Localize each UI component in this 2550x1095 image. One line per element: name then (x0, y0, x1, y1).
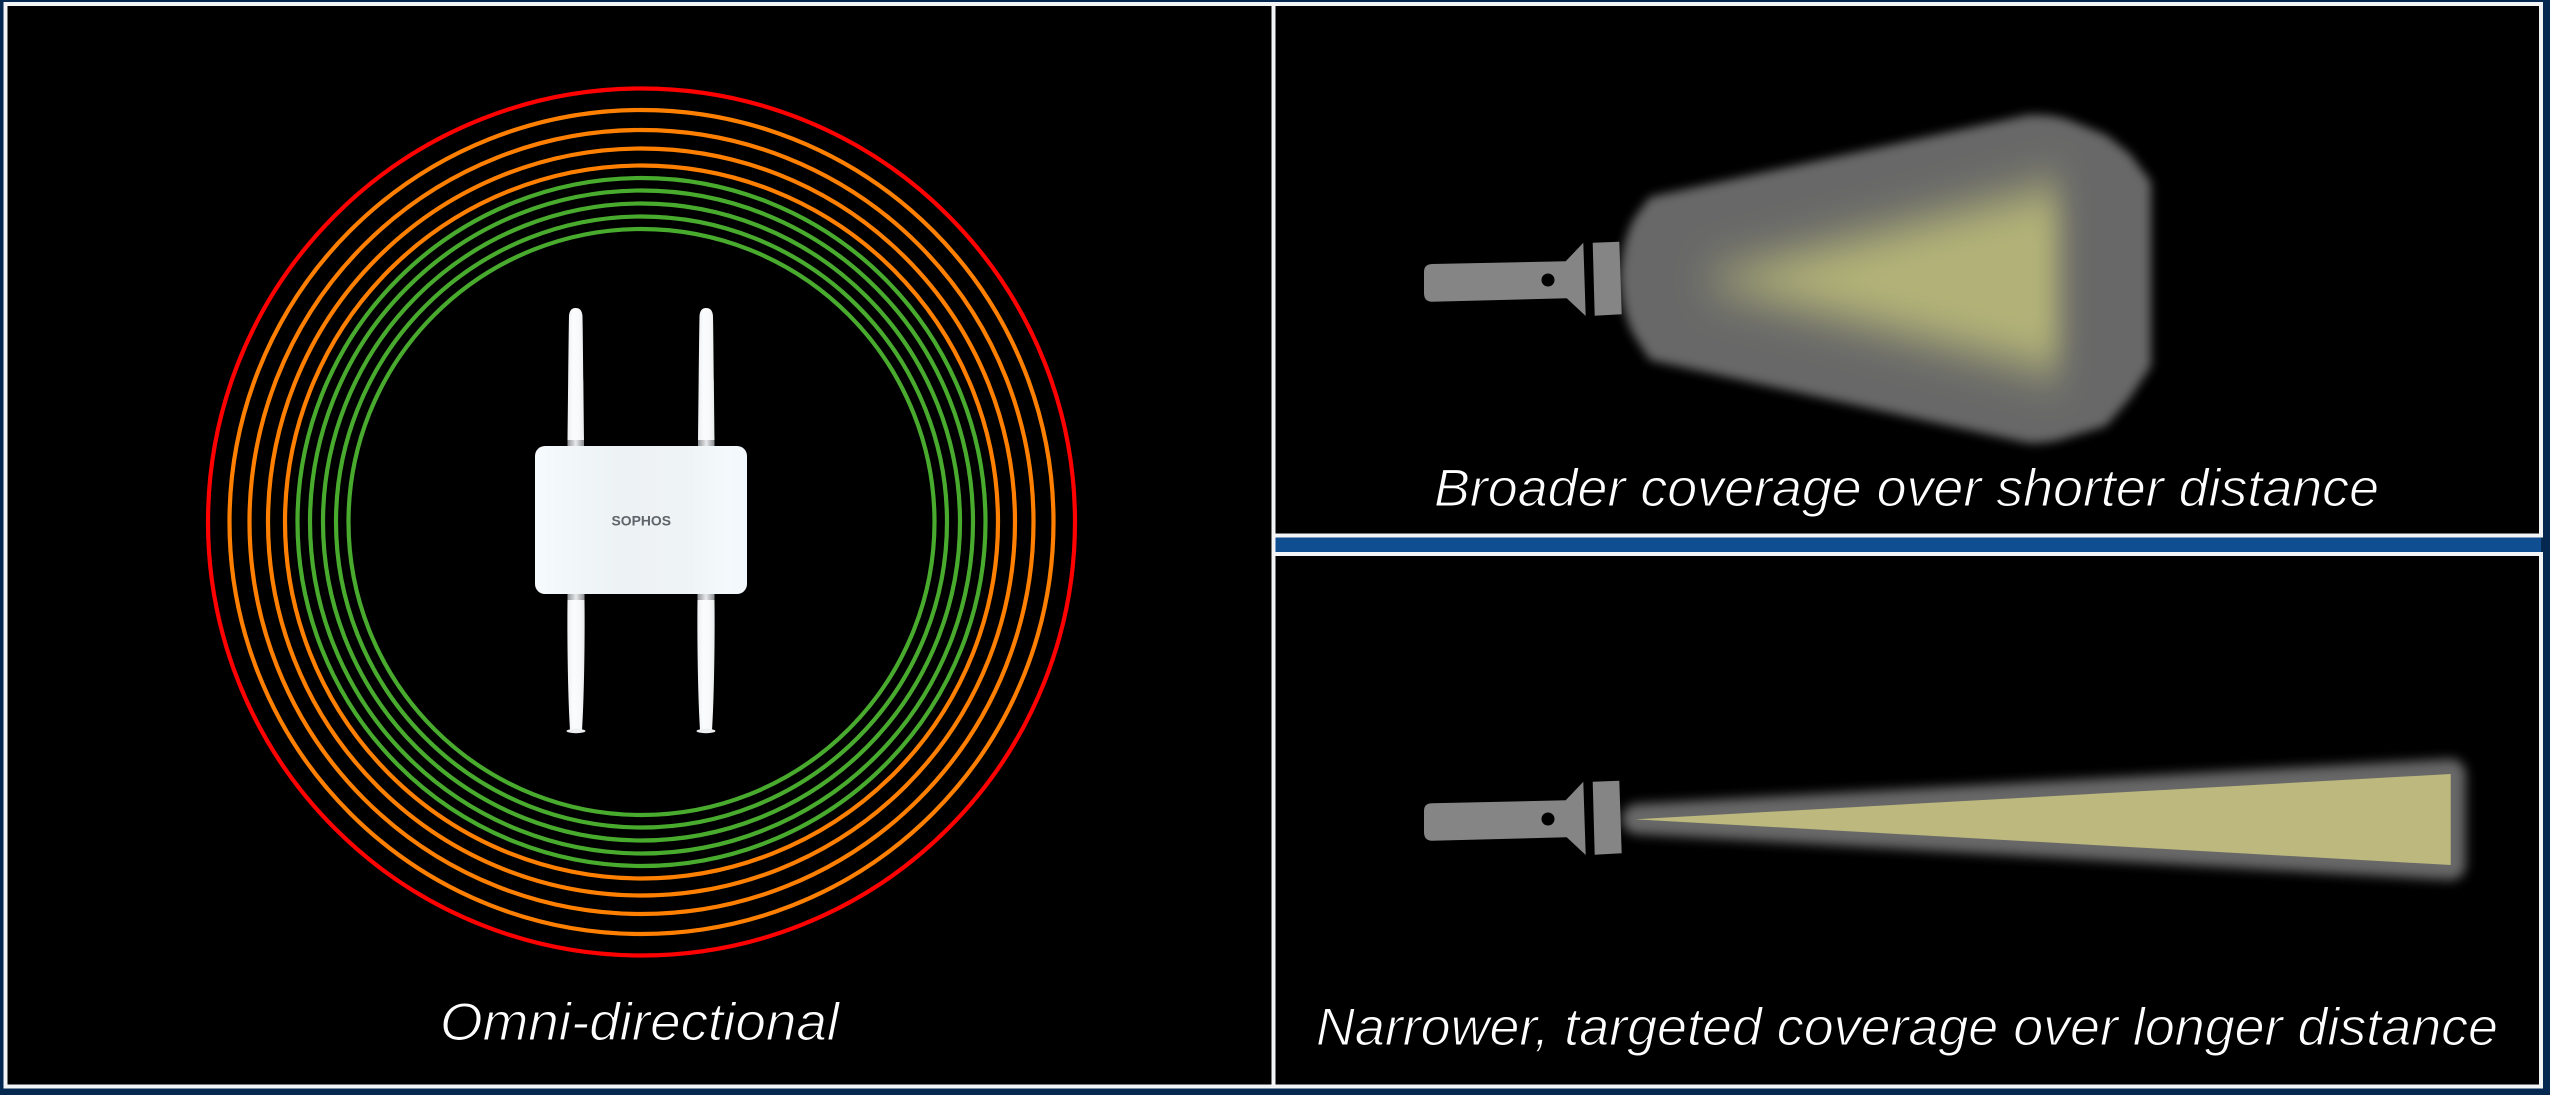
panel: broader coverage (1274, 4, 2541, 536)
device body (535, 446, 747, 594)
panel: narrower coverage (1274, 554, 2541, 1086)
flashlight icon (1424, 781, 1622, 855)
antenna: top left (568, 308, 584, 446)
caption: omni-directional: Omni-directional (440, 993, 840, 1052)
antenna: top right (698, 308, 714, 446)
background strip between right panels (1275, 537, 2541, 553)
caption: narrower coverage: Narrower, targeted coverage over longer distance (1316, 998, 2498, 1057)
access point device (535, 308, 747, 733)
caption: broader coverage: Broader coverage over shorter distance (1434, 459, 2379, 518)
panel: omni-directional (6, 4, 1274, 1086)
flashlight icon (1424, 242, 1622, 316)
coverage rings (208, 88, 1075, 956)
light beam: narrow (1635, 774, 2451, 865)
antenna: bottom right (696, 594, 716, 733)
device logo: SOPHOS (612, 513, 671, 529)
antenna: bottom left (566, 594, 586, 733)
light beam: wide (1620, 115, 2151, 443)
